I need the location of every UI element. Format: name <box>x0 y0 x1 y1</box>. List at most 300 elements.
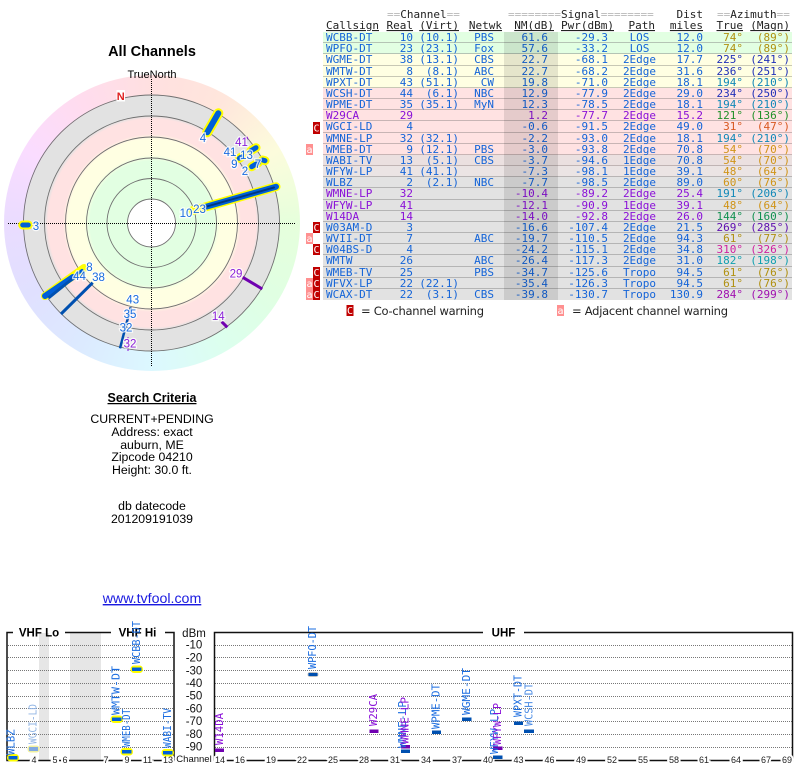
VHF channel labels: 6 <box>62 755 68 765</box>
row: WABI-TV: -3.7 <box>522 154 548 167</box>
row: WGME-DT: CBS <box>474 53 494 66</box>
row: WPME-DT: 35 <box>400 98 413 111</box>
row: WFYW-LP weak: WFYW-LP <box>326 199 373 212</box>
UHF channel labels: 64 <box>731 755 741 765</box>
row: WMNE-LP weak: WMNE-LP <box>326 187 373 200</box>
row: WMTW: -26.4 <box>515 254 548 267</box>
row: WABI-TV: 1Edge <box>623 154 656 167</box>
station: channels 10 and 23: 10 <box>180 208 192 220</box>
row: WCBB-DT: PBS <box>474 31 494 44</box>
table header: Netwk <box>469 19 502 32</box>
row: WCSH-DT: WCSH-DT <box>326 87 373 100</box>
stations: WMNE-LP pair: WMNE-LP <box>396 701 409 748</box>
row: WPXT-DT: 2Edge <box>623 76 656 89</box>
station: W29CA: W29CA <box>367 693 380 726</box>
row: WGME-DT: -68.1 <box>575 53 608 66</box>
row: WCBB-DT: LOS <box>630 31 649 44</box>
row: WPXT-DT: (210°) <box>750 76 790 89</box>
row: WMEB-TV <box>323 266 792 279</box>
UHF channel labels: 52 <box>607 755 617 765</box>
row: WFYW-LP: WFYW-LP <box>326 165 373 178</box>
row: WGCI-LD: 49.0 <box>676 120 703 133</box>
row: WGME-DT: 225° <box>716 53 743 66</box>
badges: adjacent channel: a <box>306 234 313 245</box>
station: channels 8 and 44 <box>45 262 93 298</box>
row: WGCI-LD: -0.6 <box>522 120 548 133</box>
table header: == <box>777 8 790 21</box>
station cluster: 41, 13, 9, 7, 2: 7 <box>255 159 261 171</box>
row: WFVX-LP: (76°) <box>757 277 790 290</box>
row: WGCI-LD <box>323 120 792 133</box>
row: WLBZ <box>323 176 792 189</box>
row: WFVX-LP: Tropo <box>623 277 656 290</box>
VHF grid lines <box>8 646 173 748</box>
row: WFVX-LP: WFVX-LP <box>326 277 373 290</box>
row: WCSH-DT: 29.0 <box>676 87 703 100</box>
row: W29CA <box>323 109 792 122</box>
table header: Azimuth <box>730 8 777 21</box>
row: WGCI-LD: 2Edge <box>623 120 656 133</box>
UHF channel labels: 40 <box>483 755 493 765</box>
row: WMEB-DT: WMEB-DT <box>326 143 373 156</box>
row: W04BS-D: W04BS-D <box>326 243 372 256</box>
row: WMNE-LP weak: -89.2 <box>575 187 608 200</box>
criteria lines: Height: 30.0 ft. <box>112 463 192 477</box>
VHF channel labels: 11 <box>143 755 152 765</box>
row: WABI-TV: WABI-TV <box>326 154 373 167</box>
row: WMNE-LP <box>323 132 792 145</box>
UHF channel labels: 43 <box>513 755 524 765</box>
row: WFVX-LP <box>323 277 792 290</box>
row: WMTW: 182° <box>716 254 743 267</box>
row: WMNE-LP weak: 25.4 <box>676 187 703 200</box>
criteria lines: auburn, ME <box>120 438 184 452</box>
UHF channel labels: 49 <box>576 755 586 765</box>
row: WPXT-DT: (51.1) <box>419 76 459 89</box>
station: channels 10 and 23 <box>180 187 276 220</box>
row: WPME-DT: 12.3 <box>522 98 548 111</box>
row: W03AM-D: 21.5 <box>676 221 703 234</box>
stations: WMNE-LP pair: WMNE-LP <box>398 697 412 744</box>
row: WLBZ: 2 <box>406 176 413 189</box>
station: WABI-TV: WABI-TV <box>161 708 174 748</box>
row: WMTW: 2Edge <box>623 254 656 267</box>
row: WMTW-DT: -68.2 <box>575 65 608 78</box>
row: WPME-DT: (210°) <box>750 98 790 111</box>
north and east axes <box>8 79 296 367</box>
search criteria block <box>90 391 214 526</box>
station: WCBB-DT: WCBB-DT <box>130 620 143 664</box>
stations: channels 43, 35, 32: 32 <box>120 322 132 334</box>
row: WFYW-LP: -7.3 <box>522 165 548 178</box>
row: WABI-TV: 13 <box>400 154 413 167</box>
stations: WFYW-LP pair <box>488 703 504 759</box>
station cluster: 41, 13, 9, 7, 2: 9 <box>231 159 238 171</box>
station: channel 38 <box>61 272 105 314</box>
row: WFVX-LP: -126.3 <box>568 277 608 290</box>
UHF channel labels: 19 <box>266 755 276 765</box>
row: WCAX-DT <box>323 288 792 301</box>
row: WPME-DT <box>323 98 792 111</box>
row: WCSH-DT: 2Edge <box>623 87 656 100</box>
station: WLBZ: WLBZ <box>4 729 18 755</box>
row: W14DA: -92.8 <box>575 210 608 223</box>
row: WFVX-LP: -35.4 <box>515 277 548 290</box>
row: WCSH-DT: -77.9 <box>575 87 608 100</box>
dBm scale: dBm <box>182 628 206 640</box>
row: WABI-TV: (5.1) <box>426 154 459 167</box>
row: WMEB-TV: PBS <box>474 266 494 279</box>
station: channel 29: 29 <box>230 268 242 280</box>
row: W03AM-D: 2Edge <box>623 221 656 234</box>
row: W04BS-D: (326°) <box>750 243 790 256</box>
badges: co-channel: C <box>313 279 320 290</box>
row: WFYW-LP weak: -12.1 <box>515 199 548 212</box>
row: WMTW-DT: 8 <box>406 65 413 78</box>
row: WGME-DT: WGME-DT <box>326 53 373 66</box>
station: channel 29 <box>230 268 262 289</box>
VHF frame <box>7 632 174 760</box>
row: WMNE-LP weak <box>323 187 792 200</box>
row: WCBB-DT <box>323 31 792 44</box>
row: WGME-DT: 2Edge <box>623 53 656 66</box>
table header: == <box>387 8 401 21</box>
row: WABI-TV: (70°) <box>757 154 790 167</box>
row: WVII-DT: WVII-DT <box>326 232 373 245</box>
row: WMNE-LP weak: (206°) <box>750 187 790 200</box>
UHF channel labels: 28 <box>359 755 369 765</box>
row: WVII-DT: ABC <box>474 232 494 245</box>
row: WVII-DT <box>323 232 792 245</box>
row: WGME-DT: 38 <box>400 53 413 66</box>
row: WMNE-LP: (32.1) <box>419 132 459 145</box>
range rings <box>24 95 280 351</box>
row: WCAX-DT: (3.1) <box>426 288 459 301</box>
row: WPFO-DT <box>323 42 792 55</box>
row: WLBZ: 60° <box>723 176 743 189</box>
row: WFYW-LP: 1Edge <box>623 165 656 178</box>
UHF channel labels: 55 <box>638 755 648 765</box>
heading: Search Criteria: Search Criteria <box>108 391 198 405</box>
row: WMTW-DT: WMTW-DT <box>326 65 373 78</box>
row: WFVX-LP: 94.5 <box>676 277 703 290</box>
row: WFYW-LP: 41 <box>400 165 413 178</box>
row: W04BS-D: 4 <box>406 243 413 256</box>
station: WMTW-DT: WMTW-DT <box>110 665 122 715</box>
badges: co-channel: C <box>313 223 320 234</box>
row: WPXT-DT <box>323 76 792 89</box>
row: WLBZ: -7.7 <box>522 176 548 189</box>
station: WCSH-DT: WCSH-DT <box>522 682 536 726</box>
row: WFVX-LP: 61° <box>723 277 743 290</box>
badges: co-channel: C <box>313 245 320 256</box>
row: W03AM-D: (285°) <box>750 221 790 234</box>
row: WCAX-DT: Tropo <box>623 288 656 301</box>
row: WCAX-DT: 130.9 <box>670 288 703 301</box>
row: WMNE-LP: -93.0 <box>575 132 608 145</box>
row: W03AM-D: -16.6 <box>515 221 548 234</box>
row: WFYW-LP: (41.1) <box>419 165 459 178</box>
station: channel 14: 14 <box>212 311 225 323</box>
row: WPME-DT: 2Edge <box>623 98 656 111</box>
UHF channel labels: 22 <box>297 755 307 765</box>
row: WCAX-DT: (299°) <box>750 288 790 301</box>
row: WFVX-LP: 22 <box>400 277 413 290</box>
row: W14DA: 14 <box>400 210 413 223</box>
row: WMEB-DT: 54° <box>723 143 743 156</box>
VHF channel labels: 9 <box>124 755 130 765</box>
row: WGME-DT: (13.1) <box>419 53 459 66</box>
row: WCSH-DT: NBC <box>474 87 494 100</box>
row: WFYW-LP: 48° <box>723 165 743 178</box>
UHF channel labels: 67 <box>761 755 771 765</box>
row: WCBB-DT: 74° <box>723 31 743 44</box>
legend: co-channel warning: C <box>347 306 353 317</box>
station: channel 14 <box>212 311 227 327</box>
row: WPXT-DT: CW <box>481 76 494 89</box>
UHF frame <box>214 632 792 760</box>
polar chart background bands <box>4 75 300 371</box>
row: WCBB-DT: 10 <box>400 31 413 44</box>
table header: Real <box>386 19 413 32</box>
row: WMTW: (198°) <box>750 254 790 267</box>
row: WFYW-LP weak: 41 <box>400 199 413 212</box>
row: WGCI-LD: (47°) <box>757 120 790 133</box>
station: channel 4 <box>200 113 218 145</box>
station cluster: 41, 13, 9, 7, 2: 41 <box>224 147 236 159</box>
table header: Channel <box>400 8 447 21</box>
row: WMEB-DT: -93.8 <box>575 143 608 156</box>
UHF channel labels: 61 <box>699 755 709 765</box>
row: W03AM-D: -107.4 <box>568 221 608 234</box>
row: WPFO-DT: LOS <box>630 42 649 55</box>
heading: VHF Hi: VHF Hi <box>119 628 156 640</box>
row: WVII-DT: -19.7 <box>515 232 548 245</box>
row: WMTW-DT: 31.6 <box>676 65 703 78</box>
row: WCSH-DT: 12.9 <box>522 87 548 100</box>
row: WLBZ: 2Edge <box>623 176 656 189</box>
badges: adjacent channel <box>306 144 313 301</box>
UHF channel labels: 34 <box>421 755 431 765</box>
row: WFYW-LP weak: 48° <box>723 199 743 212</box>
row: W14DA: 26.0 <box>676 210 703 223</box>
row: WGME-DT: 17.7 <box>676 53 703 66</box>
row: WFYW-LP weak: 1Edge <box>623 199 656 212</box>
row: WPME-DT: (35.1) <box>419 98 459 111</box>
row: WMEB-TV: WMEB-TV <box>326 266 373 279</box>
criteria lines: CURRENT+PENDING <box>90 412 214 426</box>
row: WMEB-TV: 61° <box>723 266 743 279</box>
row: WMNE-LP: (210°) <box>750 132 790 145</box>
row: WPXT-DT: 19.8 <box>522 76 548 89</box>
row: WMTW-DT: 2Edge <box>623 65 656 78</box>
noise margin column shading <box>504 32 558 300</box>
database datecode: db datecode <box>118 499 186 513</box>
row: WCAX-DT: 284° <box>716 288 743 301</box>
row: WFYW-LP: (64°) <box>757 165 790 178</box>
row: WVII-DT: 2Edge <box>623 232 656 245</box>
table header: Dist <box>676 8 703 21</box>
north marker: N <box>117 91 125 103</box>
row: WMTW-DT: (8.1) <box>426 65 459 78</box>
badges: co-channel <box>313 122 320 301</box>
station cluster: 41, 13, 9, 7, 2: 41 <box>235 137 248 149</box>
station: channel 38: 38 <box>92 272 105 284</box>
row: WPME-DT: MyN <box>474 98 494 111</box>
UHF channel labels: 16 <box>235 755 245 765</box>
VHF channel labels: 13 <box>163 755 173 765</box>
station cluster: 41, 13, 9, 7, 2 <box>224 137 265 178</box>
warning badges <box>306 122 320 301</box>
row: WABI-TV <box>323 154 792 167</box>
row: WFYW-LP weak: 39.1 <box>676 199 703 212</box>
table header: (Virt) <box>419 19 459 32</box>
row: WPME-DT: 194° <box>716 98 743 111</box>
row: WABI-TV: CBS <box>474 154 494 167</box>
dBm scale: -10 <box>186 640 202 652</box>
legend: adjacent channel warning: a <box>557 306 564 317</box>
row: WPFO-DT: WPFO-DT <box>326 42 373 55</box>
row: WMTW: WMTW <box>326 254 353 267</box>
row: WLBZ: (76°) <box>757 176 790 189</box>
stations: WFYW-LP pair: WFYW-LP <box>488 709 501 754</box>
station: channel 4: 4 <box>200 133 207 145</box>
row: WLBZ: 89.0 <box>676 176 703 189</box>
row: WMNE-LP: 32 <box>400 132 413 145</box>
title: All Channels: All Channels <box>108 44 196 60</box>
row: W29CA: 1.2 <box>528 109 548 122</box>
row: WMNE-LP: -2.2 <box>522 132 548 145</box>
row: WMTW-DT: 22.7 <box>522 65 548 78</box>
row: WMEB-DT: PBS <box>474 143 494 156</box>
row: W03AM-D: 269° <box>716 221 743 234</box>
row: WMEB-TV: 25 <box>400 266 413 279</box>
row: WFYW-LP: -98.1 <box>575 165 608 178</box>
row: W04BS-D <box>323 243 792 256</box>
row: WPXT-DT: WPXT-DT <box>326 76 373 89</box>
badges: adjacent channel: a <box>306 290 313 301</box>
table header: ======== <box>508 8 561 21</box>
row: WGME-DT: (241°) <box>750 53 790 66</box>
VHF channel labels: 7 <box>103 755 109 765</box>
table header: True <box>716 19 743 32</box>
row: WMEB-DT: 2Edge <box>623 143 656 156</box>
station: WMEB-DT: WMEB-DT <box>120 709 133 747</box>
row: WFVX-LP: (22.1) <box>419 277 459 290</box>
badges: co-channel: C <box>313 268 320 279</box>
stations: WMNE-LP pair <box>396 697 412 753</box>
row: WPFO-DT: 12.0 <box>676 42 703 55</box>
database datecode: 201209191039 <box>111 512 193 526</box>
row: WMEB-DT: (12.1) <box>419 143 459 156</box>
station: channel 3: 3 <box>33 221 39 233</box>
row: W29CA: 15.2 <box>676 109 703 122</box>
row: WCBB-DT: 61.6 <box>522 31 548 44</box>
row: W04BS-D: 2Edge <box>623 243 656 256</box>
table header: == <box>717 8 731 21</box>
UHF channel labels: 46 <box>544 755 555 765</box>
dBm scale: -80 <box>186 729 202 741</box>
table header: Pwr(dBm) <box>561 19 614 32</box>
row: W03AM-D: 3 <box>406 221 413 234</box>
row: W14DA: 2Edge <box>623 210 656 223</box>
row: WABI-TV: -94.6 <box>575 154 608 167</box>
station: WPXT-DT: WPXT-DT <box>512 674 524 717</box>
UHF spectrum chart <box>213 625 792 765</box>
legend: adjacent channel warning: = Adjacent channel warning <box>572 304 728 318</box>
row: WMTW: ABC <box>474 254 494 267</box>
row: WMEB-DT: (70°) <box>757 143 790 156</box>
row: WPFO-DT: (23.1) <box>419 42 459 55</box>
row: WCBB-DT: (89°) <box>757 31 790 44</box>
row: W29CA: (136°) <box>750 109 790 122</box>
row: W03AM-D <box>323 221 792 234</box>
row: W14DA: (160°) <box>750 210 790 223</box>
link: tvfool: www.tvfool.com <box>102 591 201 607</box>
table header: Signal <box>561 8 601 21</box>
row: WVII-DT: 94.3 <box>676 232 703 245</box>
station: channels 8 and 44: 44 <box>73 271 86 283</box>
table header: (Magn) <box>750 19 790 32</box>
row: WMNE-LP weak: 32 <box>400 187 413 200</box>
row: WMNE-LP: 194° <box>716 132 743 145</box>
row: WVII-DT: 61° <box>723 232 743 245</box>
database datecode <box>111 499 193 526</box>
UHF channel labels: 69 <box>782 755 792 765</box>
row: W29CA: -77.7 <box>575 109 608 122</box>
row: W14DA: W14DA <box>326 210 359 223</box>
row: WPFO-DT: 23 <box>400 42 413 55</box>
row: WPXT-DT: -71.0 <box>575 76 608 89</box>
row: WGCI-LD: 31° <box>723 120 743 133</box>
row: WVII-DT: 7 <box>406 232 413 245</box>
row: WFYW-LP weak <box>323 199 792 212</box>
row: W14DA: -14.0 <box>515 210 548 223</box>
station: WPFO-DT: WPFO-DT <box>306 625 319 669</box>
row: WLBZ: -98.5 <box>575 176 608 189</box>
row: WMNE-LP: 18.1 <box>676 132 703 145</box>
row: WMEB-DT: 9 <box>406 143 413 156</box>
VHF channel labels: 4 <box>31 755 37 765</box>
row: WMNE-LP weak: -10.4 <box>515 187 548 200</box>
table header: Path <box>628 19 655 32</box>
dBm scale <box>176 628 212 765</box>
row: W03AM-D: W03AM-D <box>326 221 372 234</box>
row: WPME-DT: -78.5 <box>575 98 608 111</box>
table header: Callsign <box>326 19 379 32</box>
dBm scale: -40 <box>186 678 202 690</box>
row: WPXT-DT: 194° <box>716 76 743 89</box>
row: W04BS-D: 34.8 <box>676 243 703 256</box>
row: WCAX-DT: CBS <box>474 288 494 301</box>
row: WMEB-TV: 94.5 <box>676 266 703 279</box>
station: channel 3 <box>23 221 39 233</box>
row: WMTW: 26 <box>400 254 413 267</box>
row: WABI-TV: 70.8 <box>676 154 703 167</box>
row: WMTW: -117.3 <box>568 254 608 267</box>
row: WCSH-DT: 234° <box>716 87 743 100</box>
badges: adjacent channel: a <box>306 279 313 290</box>
UHF grid lines <box>215 646 792 748</box>
row: WGCI-LD: -91.5 <box>575 120 608 133</box>
dBm scale: -30 <box>186 666 202 678</box>
legend: co-channel warning: = Co-channel warning <box>361 304 484 318</box>
row: WCSH-DT <box>323 87 792 100</box>
row: WABI-TV: 54° <box>723 154 743 167</box>
row: WFYW-LP <box>323 165 792 178</box>
row: WMEB-TV: (76°) <box>757 266 790 279</box>
row: WCSH-DT: (6.1) <box>426 87 459 100</box>
